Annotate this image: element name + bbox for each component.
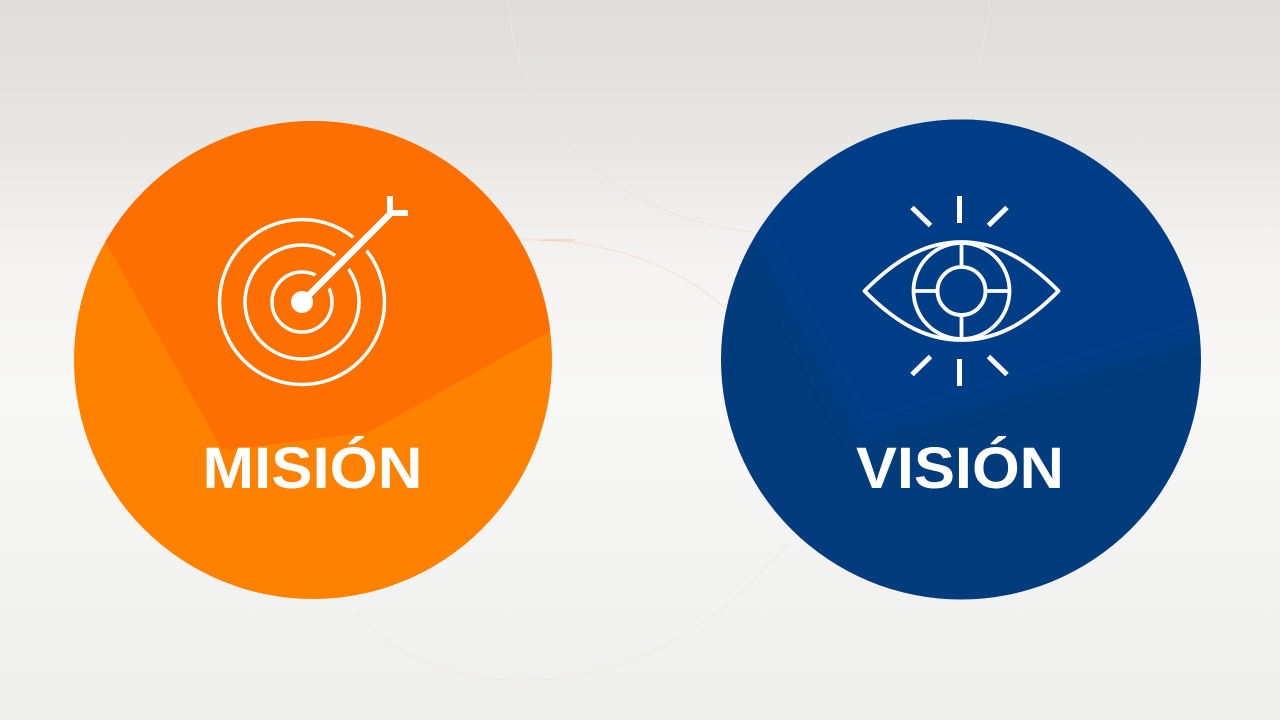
heading: vision: VISIÓN bbox=[856, 436, 1064, 501]
circle: orange base bbox=[70, 110, 556, 602]
heading: mision: MISIÓN bbox=[202, 436, 422, 501]
circle: blue base bbox=[718, 100, 1215, 602]
panel: mision bbox=[70, 110, 556, 602]
icon: eye bbox=[864, 196, 1058, 386]
icon: eye rays bbox=[912, 196, 1007, 386]
panel: vision bbox=[718, 100, 1215, 602]
icon: target with arrow bbox=[220, 196, 408, 384]
faint connecting curves bbox=[355, 0, 990, 681]
